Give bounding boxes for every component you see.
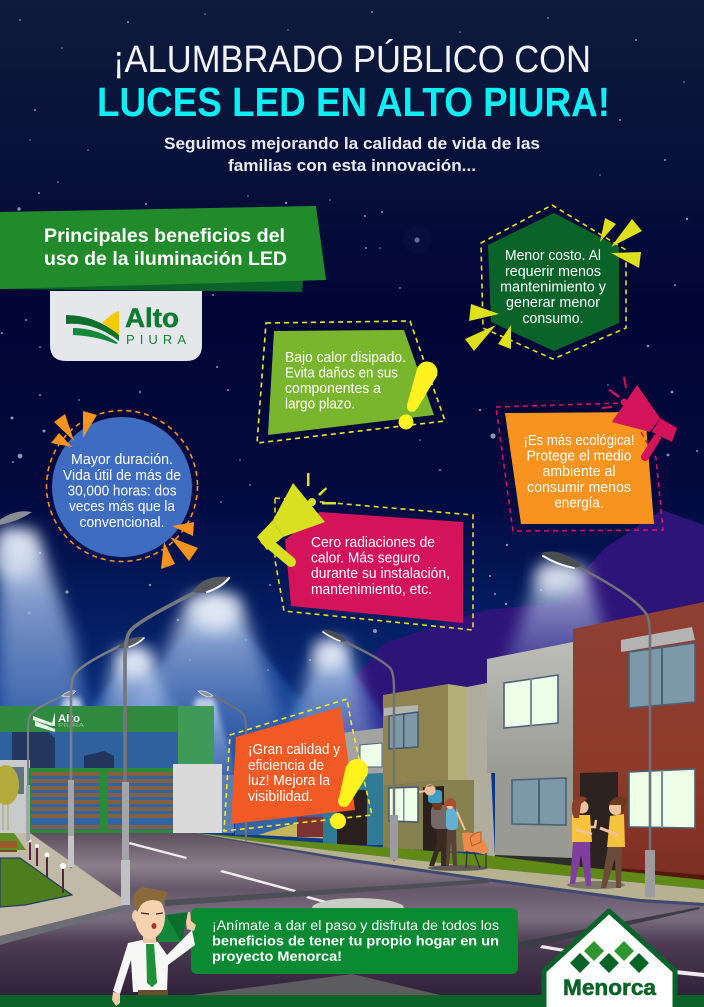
- panel: mayor duración: veces más que la: [69, 498, 176, 515]
- panel: más ecológica: ¡Es más ecológica!: [524, 432, 634, 449]
- lamp: middle right: [321, 630, 398, 860]
- subtitle: [164, 134, 540, 175]
- icon: pink megaphone: [602, 377, 677, 457]
- title: LUCES LED EN ALTO PIURA!: [97, 79, 610, 125]
- speech bubble with call to action: beneficios de tener tu propio hogar en un: [212, 932, 499, 948]
- panel: bajo calor disipado: largo plazo.: [285, 396, 355, 412]
- white pillar: [173, 764, 222, 833]
- Alto Piura logo card: PIURA: [126, 332, 186, 347]
- panel: más ecológica: consumir menos: [527, 479, 631, 496]
- family with stroller: [419, 784, 488, 871]
- tree: [0, 765, 19, 830]
- panel: mayor duración: 30,000 horas: dos: [68, 482, 176, 500]
- lamp: left middle: [68, 637, 144, 867]
- sign logo: Alto: [58, 713, 80, 725]
- Alto Piura logo card: [50, 291, 202, 361]
- panel: cero radiaciones: durante su instalación,: [311, 565, 450, 582]
- panel: bajo calor disipado: Evita daños en sus: [285, 364, 398, 382]
- icon: exclamation mark: [330, 759, 368, 829]
- panel: gran calidad: eficiencia de: [248, 757, 324, 774]
- footer band: [0, 995, 704, 1007]
- purple glow behind houses: [340, 510, 704, 745]
- panel: menor costo: consumo.: [522, 310, 584, 327]
- panel: cero radiaciones: mantenimiento, etc.: [311, 581, 432, 598]
- lamp: behind left: [198, 691, 246, 840]
- fence: [29, 768, 183, 833]
- banner: principales beneficios: uso de la iluminación LED: [44, 248, 287, 270]
- panel: cero radiaciones: calor. Más seguro: [311, 550, 420, 566]
- road: [0, 833, 704, 1000]
- panel: menor costo: mantenimiento y: [500, 278, 606, 296]
- stroller: [462, 832, 488, 868]
- grey house: [487, 642, 573, 866]
- stars: [1, 11, 698, 671]
- panel: más ecológica: [496, 377, 677, 531]
- subtitle: familias con esta innovación...: [228, 156, 476, 175]
- speech bubble with call to action: ¡Anímate a dar el paso y disfruta de todos los: [212, 917, 499, 933]
- speech bubble with call to action: [191, 908, 518, 974]
- right grass and sidewalk: [190, 832, 704, 906]
- banner: principales beneficios: Principales beneficios del: [44, 225, 285, 247]
- icon: exclamation mark: [398, 362, 438, 430]
- panel: más ecológica: ambiente al: [542, 463, 616, 480]
- houses row far left: [235, 728, 383, 845]
- icon: yellow megaphone: [257, 473, 336, 562]
- panel: menor costo: generar menor: [506, 294, 600, 311]
- light beams: [0, 530, 630, 840]
- road markings and drains: [128, 842, 704, 995]
- lamp: far right: [541, 552, 655, 897]
- panel: bajo calor disipado: [257, 321, 445, 443]
- sign logo: [33, 712, 85, 732]
- lamp: front left: [121, 577, 229, 905]
- panel: menor costo: Menor costo. Al: [505, 247, 601, 264]
- couple talking: [567, 796, 626, 889]
- panel: menor costo: requerir menos: [505, 263, 601, 280]
- panel: gran calidad: ¡Gran calidad y: [248, 741, 340, 758]
- street lamps: [0, 511, 655, 905]
- panel: gran calidad: luz! Mejora la: [248, 772, 331, 789]
- panel: más ecológica: Protege el medio: [526, 448, 632, 464]
- Menorca logo: Menorca: [563, 975, 657, 1000]
- banner: principales beneficios: [0, 206, 326, 292]
- subtitle: Seguimos mejorando la calidad de vida de las: [164, 134, 540, 153]
- panel: cero radiaciones: Cero radiaciones de: [311, 534, 435, 551]
- panel: bajo calor disipado: Bajo calor disipado.: [285, 349, 406, 366]
- speech bubble with call to action: proyecto Menorca!: [212, 948, 342, 964]
- lamp: cropped left edge: [0, 511, 32, 526]
- lamp: far left: [26, 691, 76, 840]
- businessman illustration: [112, 887, 196, 1006]
- left park with sidewalk: [0, 833, 133, 945]
- red house: [573, 602, 704, 882]
- logo diamonds: [570, 941, 649, 973]
- panel: mayor duración: Vida útil de más de: [63, 467, 181, 484]
- Menorca logo: [544, 911, 675, 1007]
- panel: más ecológica: energía.: [554, 494, 604, 512]
- olive house: [383, 683, 495, 857]
- sign logo: PIURA: [58, 723, 85, 729]
- panel: bajo calor disipado: componentes a: [285, 380, 382, 397]
- panel: menor costo: [465, 205, 642, 359]
- Alto Piura logo card: Alto: [125, 303, 179, 333]
- panel: mayor duración: Mayor duración.: [71, 451, 173, 468]
- panel: mayor duración: convencional.: [80, 514, 164, 531]
- background building with green sign: [0, 706, 234, 833]
- title: ¡ALUMBRADO PÚBLICO CON: [113, 38, 591, 81]
- title: [97, 38, 610, 125]
- panel: gran calidad: [224, 699, 372, 831]
- panel: cero radiaciones: [257, 473, 473, 630]
- panel: gran calidad: visibilidad.: [248, 788, 313, 805]
- panel: mayor duración: [46, 410, 198, 569]
